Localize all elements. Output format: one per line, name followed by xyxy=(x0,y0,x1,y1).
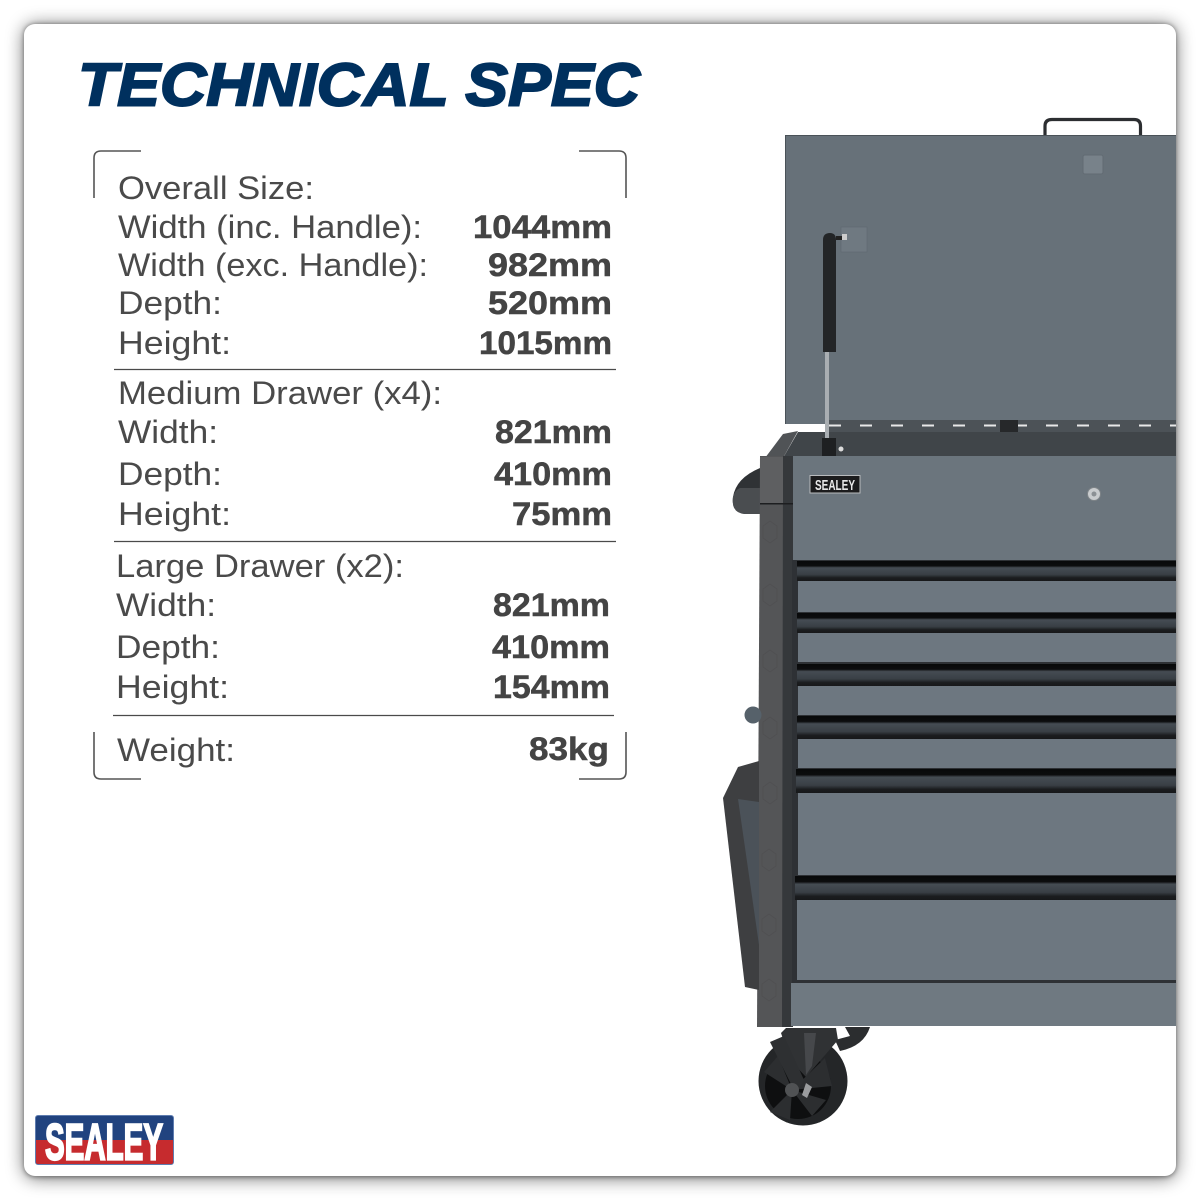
large drawer group: Large Drawer (x2): xyxy=(116,548,404,584)
cabinet interior xyxy=(783,432,1180,458)
overall size group xyxy=(114,170,616,370)
weight row: 83kg xyxy=(529,731,609,767)
badge xyxy=(810,476,860,494)
side handle xyxy=(733,468,760,514)
medium drawer group xyxy=(114,375,616,542)
overall size group: 1044mm xyxy=(473,209,612,245)
medium drawer group: Medium Drawer (x4): xyxy=(118,375,442,411)
open lid xyxy=(785,135,1180,424)
drawer rails xyxy=(797,561,1180,581)
base panel xyxy=(791,983,1180,1026)
tool cabinet illustration xyxy=(723,120,1180,1126)
overall size group: 982mm xyxy=(488,247,612,283)
title: TECHNICAL SPEC xyxy=(78,52,642,118)
side post xyxy=(757,456,793,1027)
overall size group: 520mm xyxy=(488,285,612,321)
lid handle xyxy=(1045,120,1140,137)
bracket frame xyxy=(94,151,626,779)
large drawer group: 154mm xyxy=(493,669,610,705)
front caster xyxy=(758,1028,848,1126)
medium drawer group: 75mm xyxy=(512,496,612,532)
large drawer group: 410mm xyxy=(492,629,610,665)
hinge xyxy=(825,420,1180,433)
large drawer group: Height: xyxy=(116,669,229,705)
large drawer group: 821mm xyxy=(493,587,610,623)
large drawer group: Width: xyxy=(116,587,216,623)
logo: Sealey xyxy=(36,1114,174,1170)
medium drawer group: Depth: xyxy=(118,456,222,492)
weight row: Weight: xyxy=(117,732,235,768)
large drawer group xyxy=(113,548,614,716)
overall size group: Height: xyxy=(118,325,231,361)
overall size group: Width (exc. Handle): xyxy=(118,247,428,283)
front top panel xyxy=(792,456,1180,560)
medium drawer group: 821mm xyxy=(495,414,612,450)
panel: specification table xyxy=(94,151,626,779)
medium drawer group: Width: xyxy=(118,414,218,450)
rear caster xyxy=(835,1027,870,1051)
post hexagons xyxy=(762,521,777,1001)
medium drawer group: 410mm xyxy=(494,456,612,492)
large drawer group: Depth: xyxy=(116,629,220,665)
gas strut xyxy=(822,233,847,456)
drawer fronts xyxy=(798,581,1180,612)
drawers xyxy=(792,560,1180,983)
weight row xyxy=(117,731,609,768)
overall size group: 1015mm xyxy=(479,325,612,361)
drawer area background xyxy=(792,560,1180,983)
overall size group: Depth: xyxy=(118,285,222,321)
side bin xyxy=(723,761,759,990)
overall size group: Width (inc. Handle): xyxy=(118,209,422,245)
badge: SEALEY xyxy=(815,477,855,494)
inner left rim xyxy=(766,431,798,456)
overall size group: Overall Size: xyxy=(118,170,314,206)
lock xyxy=(1088,488,1100,500)
side knob xyxy=(744,706,762,724)
medium drawer group: Height: xyxy=(118,496,231,532)
logo: Sealey: SEALEY xyxy=(45,1114,163,1170)
